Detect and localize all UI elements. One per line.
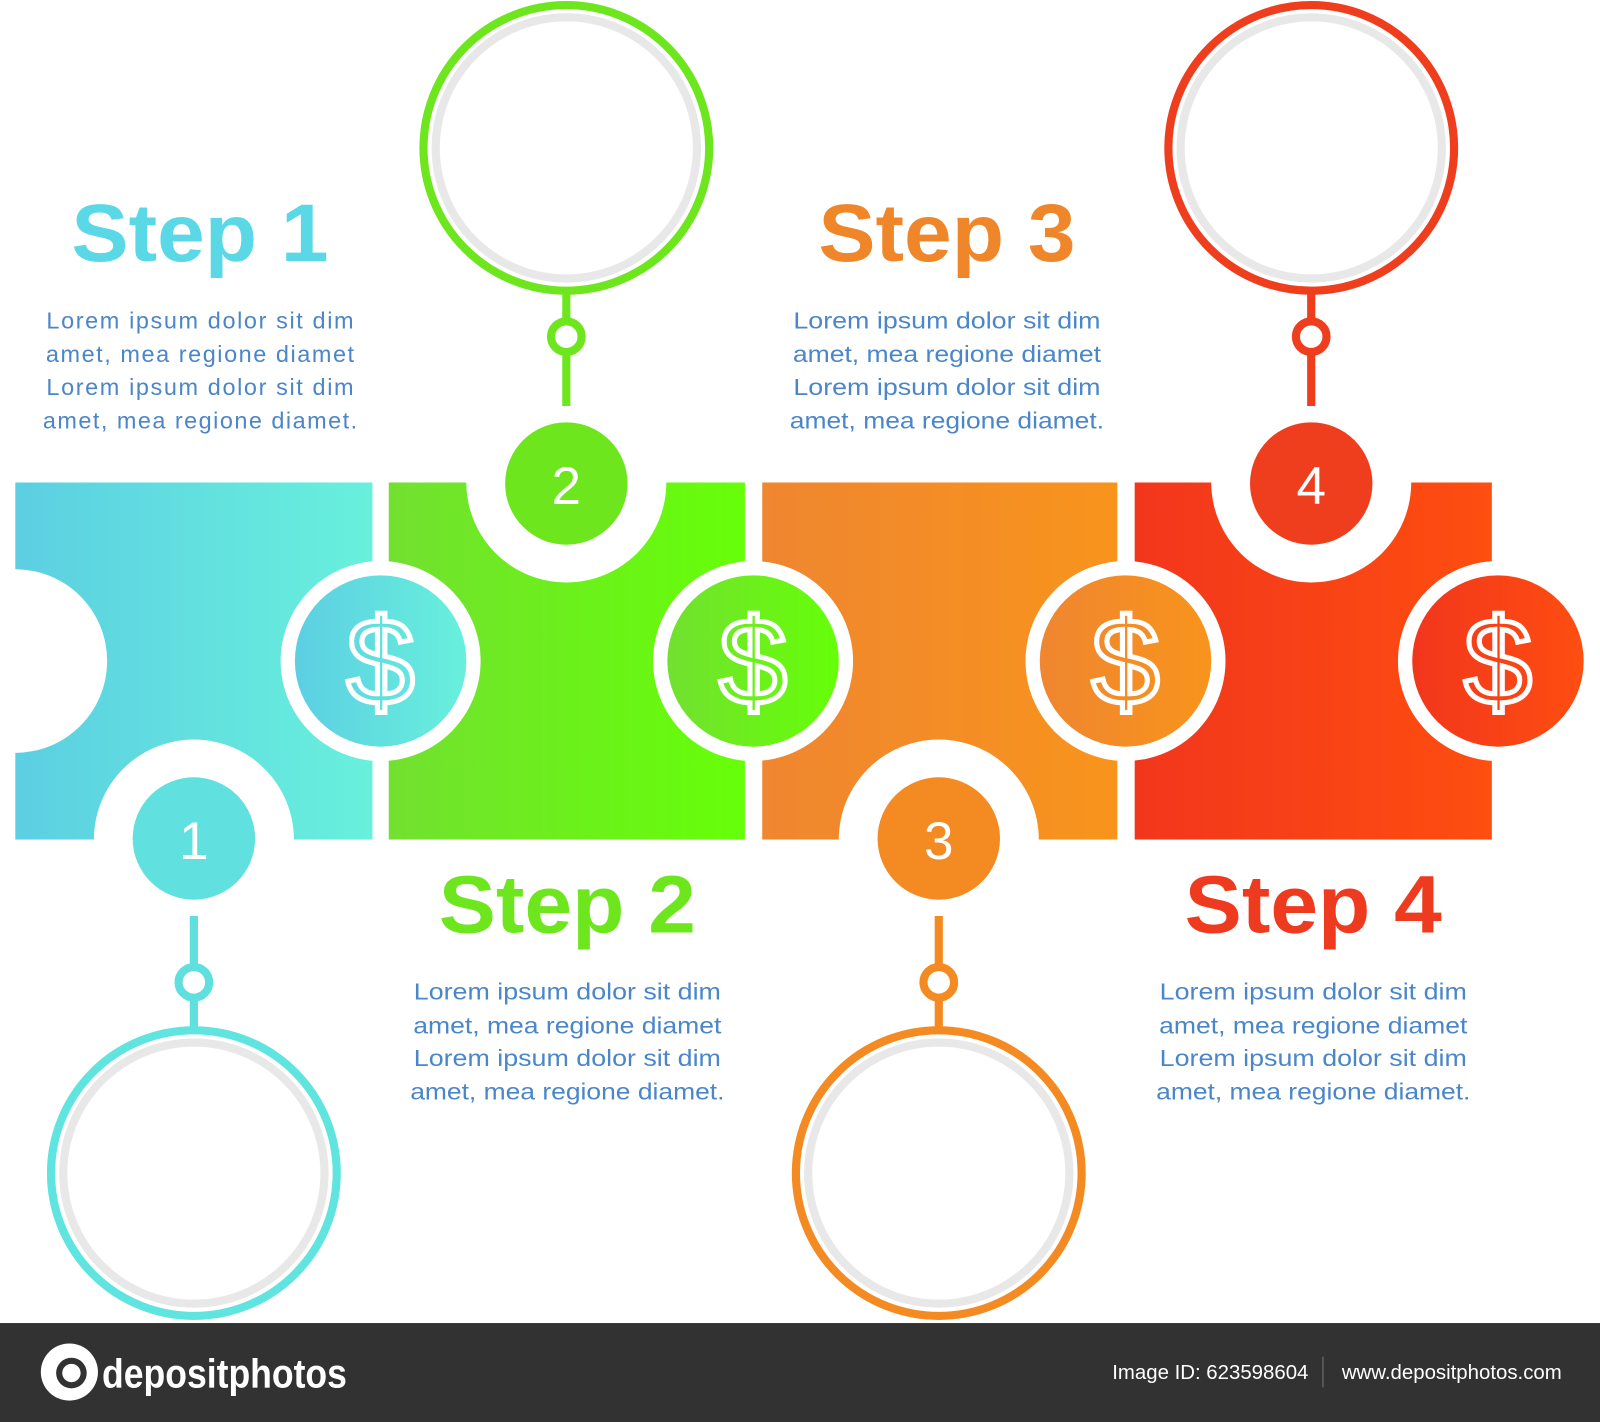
- text block 3: Lorem ipsum dolor sit dim: [793, 307, 1101, 333]
- footer bar: [0, 1323, 1600, 1422]
- text block 2: amet, mea regione diamet: [413, 1012, 722, 1038]
- title: Step 1: Step 1: [71, 188, 329, 279]
- text block 4: amet, mea regione diamet.: [1156, 1079, 1470, 1105]
- text block 2: amet, mea regione diamet.: [410, 1079, 724, 1105]
- text block 1: Lorem ipsum dolor sit dim: [46, 307, 354, 333]
- icon: dollar 1: [281, 561, 481, 761]
- connector 4 with ring: [1168, 5, 1454, 406]
- text block 3: amet, mea regione diamet.: [790, 407, 1104, 433]
- connector 1 with ring: [51, 916, 337, 1316]
- panel 4 red: [1135, 483, 1492, 840]
- text block 3: [790, 307, 1104, 433]
- panel 2 green: [389, 483, 745, 840]
- number badge 2: [505, 422, 628, 545]
- logo text: depositphotos: [102, 1350, 347, 1396]
- panel: puzzle band: [0, 383, 1492, 939]
- text block 2: Lorem ipsum dolor sit dim: [414, 979, 721, 1005]
- connector 2 with ring: [423, 5, 709, 406]
- connector 3 with ring: [796, 916, 1082, 1316]
- number badge 3: [878, 777, 1000, 900]
- icon: dollar 1: $: [347, 593, 415, 730]
- text block 3: amet, mea regione diamet: [793, 341, 1102, 367]
- text block 4: Lorem ipsum dolor sit dim: [1160, 1045, 1467, 1071]
- panel 1 cyan: [15, 483, 372, 840]
- text block 4: amet, mea regione diamet: [1159, 1012, 1468, 1038]
- icon: dollar 3: [1026, 561, 1226, 761]
- panel 3 orange: [762, 483, 1117, 840]
- text block 1: [43, 307, 357, 433]
- number badge 2: 2: [552, 457, 581, 516]
- number badge 4: 4: [1296, 457, 1326, 516]
- text block 1: Lorem ipsum dolor sit dim: [46, 374, 354, 400]
- icon: dollar 4: [1398, 561, 1598, 761]
- icon: dollar 3: $: [1091, 593, 1160, 730]
- icon: dollar 2: $: [719, 593, 787, 730]
- number badge 4: [1250, 422, 1372, 545]
- text block 1: amet, mea regione diamet: [46, 341, 355, 367]
- icon: dollar 2: [653, 561, 853, 761]
- text block 3: Lorem ipsum dolor sit dim: [793, 374, 1101, 400]
- image id: Image ID: 623598604: [1112, 1362, 1308, 1384]
- url: www.depositphotos.com: [1341, 1362, 1562, 1384]
- text block 4: [1156, 979, 1470, 1105]
- icon: dollar 4: $: [1464, 593, 1532, 730]
- text block 1: amet, mea regione diamet.: [43, 407, 357, 433]
- text block 2: Lorem ipsum dolor sit dim: [414, 1045, 721, 1071]
- text block 4: Lorem ipsum dolor sit dim: [1160, 979, 1467, 1005]
- number badge 3: 3: [924, 812, 954, 871]
- title: Step 2: Step 2: [439, 859, 696, 950]
- number badge 1: [133, 777, 255, 900]
- icon: camera logo: [41, 1343, 98, 1401]
- text block 2: [410, 979, 724, 1105]
- cutouts: [0, 383, 1411, 939]
- number badge 1: 1: [179, 812, 209, 871]
- title: Step 3: Step 3: [818, 188, 1076, 279]
- title: Step 4: Step 4: [1185, 859, 1442, 950]
